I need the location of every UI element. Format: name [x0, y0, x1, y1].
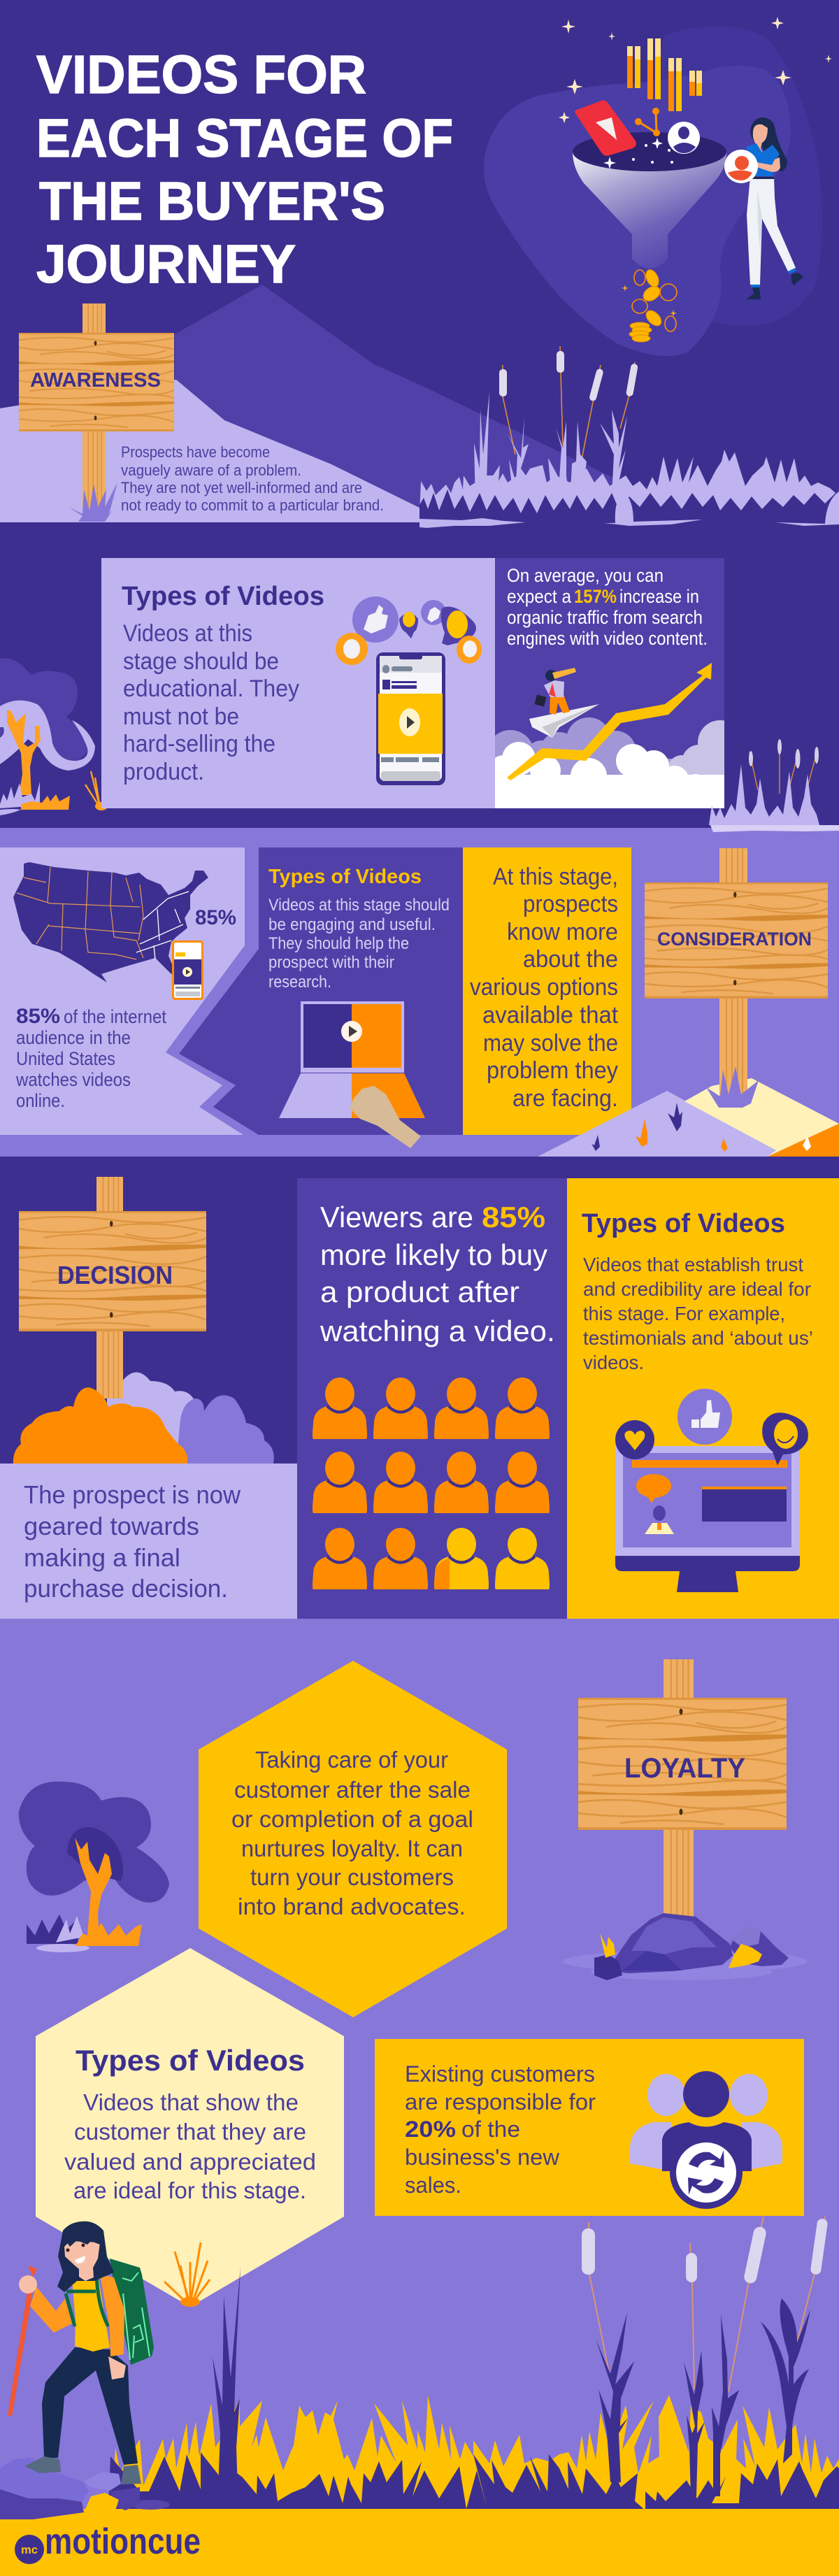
stat text: a product after	[320, 1275, 519, 1308]
statistic text: watches videos	[15, 1069, 131, 1090]
backpack	[110, 2259, 154, 2365]
sign: consideration: CONSIDERATION	[657, 929, 812, 950]
icon: phone on map	[172, 940, 203, 1000]
body text	[64, 2089, 316, 2203]
panel: prospect decision text: making a final	[24, 1543, 180, 1572]
body text right aligned: about the	[523, 946, 618, 973]
face and neck	[753, 124, 768, 154]
body text: They should help the	[268, 934, 409, 953]
logo: motioncue	[15, 2521, 201, 2564]
sign: loyalty: LOYALTY	[624, 1753, 745, 1784]
growth arrow	[507, 663, 712, 780]
body text: testimonials and ‘about us’	[583, 1327, 813, 1349]
woman holding a profile disc	[724, 117, 803, 299]
bottom yellow band	[0, 2509, 839, 2576]
hiker with backpack and pole	[8, 2221, 154, 2484]
orange grass tuft on panel	[164, 2242, 210, 2307]
stat text: engines with video content.	[507, 628, 708, 649]
panel: types of videos (awareness)	[101, 558, 495, 808]
text: awareness description: not ready to commit to a particular brand.	[121, 496, 384, 514]
panel: prospect decision text: geared towards	[24, 1512, 199, 1540]
logo: motioncue: motioncue	[45, 2521, 201, 2562]
heading: Types of Videos	[268, 866, 422, 888]
stat text	[320, 1201, 555, 1347]
section 4 background: loyalty	[0, 1619, 839, 2510]
sign: decision: DECISION	[57, 1261, 173, 1289]
body text right aligned: prospects	[523, 891, 618, 917]
icon: profile	[668, 122, 700, 154]
body text: research.	[268, 973, 331, 992]
panel: hexagon loyalty text: customer after the sale	[234, 1777, 471, 1803]
title	[36, 45, 453, 294]
bushes	[107, 1372, 274, 1464]
statistic text: of the internet	[64, 1006, 166, 1027]
text: awareness description: vaguely aware of a problem.	[121, 461, 301, 479]
body text: videos.	[583, 1352, 644, 1373]
bar chart	[627, 38, 702, 111]
body text: educational. They	[123, 675, 299, 702]
heading: Types of Videos	[582, 1209, 785, 1238]
legs	[42, 2347, 138, 2465]
hills with tufts	[538, 1078, 839, 1157]
icon: monitor with testimonial	[615, 1389, 808, 1592]
icon: returning customers	[630, 2071, 782, 2209]
panel: prospect decision text	[0, 1464, 297, 1619]
body text: stage should be	[123, 648, 279, 675]
body text right aligned: available that	[482, 1002, 619, 1029]
pictogram of people	[313, 1378, 550, 1589]
body text right aligned: At this stage,	[493, 864, 618, 890]
yellow grass	[112, 2395, 839, 2510]
heading: Types of Videos	[76, 2044, 305, 2077]
funnel illustration	[484, 17, 832, 356]
cattail heads	[582, 2218, 828, 2284]
heart bubble	[615, 1420, 654, 1459]
icon: laptop with video	[279, 1001, 425, 1148]
body text: Videos at this stage should	[268, 896, 450, 915]
tree, loyalty	[19, 1782, 169, 1952]
icon: video card	[575, 101, 636, 156]
body text right aligned: are facing.	[512, 1085, 618, 1112]
body text right aligned: may solve the	[483, 1030, 618, 1057]
panel: types of videos (decision)	[567, 1178, 839, 1619]
body text: product.	[123, 759, 204, 785]
sign: awareness: AWARENESS	[30, 369, 161, 392]
title: JOURNEY	[36, 234, 296, 294]
body text: are ideal for this stage.	[73, 2177, 306, 2203]
body text right aligned	[470, 864, 619, 1112]
icon: share network	[635, 108, 660, 136]
body text: Videos that show the	[83, 2089, 299, 2115]
panel: hexagon loyalty text: into brand advocates.	[238, 1894, 466, 1919]
face and neck	[64, 2241, 100, 2281]
stat text: of the	[461, 2117, 520, 2142]
body text	[123, 620, 299, 785]
wink bubble	[762, 1412, 808, 1466]
text: awareness description: Prospects have become	[121, 443, 270, 461]
walking pole	[8, 2289, 33, 2417]
map percent label: 85%	[195, 906, 236, 929]
body text: and credibility are ideal for	[583, 1278, 811, 1300]
panel: prospect decision text: The prospect is now	[24, 1480, 241, 1509]
ground puddles	[420, 492, 839, 528]
grass at consideration sign base	[706, 1066, 759, 1108]
body text	[268, 896, 450, 992]
map of the United States	[13, 862, 208, 982]
heading: Types of Videos	[122, 582, 324, 611]
mountain range	[0, 285, 661, 522]
light swirl	[0, 701, 95, 771]
rock under hiker	[0, 2458, 170, 2519]
funnel	[573, 132, 726, 269]
section 1 background: awareness	[0, 0, 839, 828]
body text right aligned: know more	[507, 919, 618, 945]
body text: Videos at this	[123, 620, 252, 647]
tree left of panel	[0, 658, 114, 815]
light grass blades	[420, 392, 839, 514]
panel: prospect decision text: purchase decision.	[24, 1574, 228, 1603]
statistic text: audience in the	[16, 1027, 131, 1048]
statistic text: online.	[16, 1090, 65, 1111]
logo: motioncue: mc	[21, 2543, 38, 2556]
panel: hexagon loyalty text: nurtures loyalty. It can	[241, 1836, 463, 1861]
grass with reeds, lower right	[709, 739, 819, 825]
sign: decision	[19, 1177, 206, 1398]
body text: prospect with their	[268, 953, 394, 972]
stat text: business's new	[405, 2145, 560, 2170]
body text right aligned: various options	[470, 974, 618, 1001]
panel: hexagon loyalty text: or completion of a goal	[231, 1806, 473, 1832]
text: awareness description: They are not yet well-informed and are	[121, 479, 362, 496]
stat text: increase in	[619, 586, 699, 607]
panel: viewers 85% stat	[297, 1178, 567, 1619]
shoes	[751, 285, 760, 287]
stat text: Viewers are	[320, 1201, 473, 1233]
stat text: watching a video.	[320, 1315, 555, 1347]
pants	[747, 177, 796, 285]
panel: hexagon loyalty text: Taking care of your	[255, 1747, 448, 1773]
stat text	[405, 2061, 596, 2198]
icon: social reactions	[336, 596, 482, 665]
panel: at this stage	[463, 847, 631, 1135]
clouds	[495, 717, 724, 808]
canopy	[0, 658, 89, 766]
icon: smartphone with video	[376, 652, 445, 785]
stat text: sales.	[405, 2173, 461, 2198]
body text: must not be	[123, 703, 239, 730]
reeds and grass, bottom	[108, 2217, 839, 2510]
shirt	[746, 143, 780, 176]
coins and smileys	[622, 268, 677, 342]
stat text	[507, 565, 708, 649]
sign: consideration	[645, 848, 828, 1105]
panel: hexagon loyalty text: turn your customers	[250, 1864, 454, 1890]
dark grass foreground	[108, 2452, 839, 2510]
thumb up bubble	[677, 1389, 732, 1445]
body text	[583, 1254, 813, 1373]
body text: Videos that establish trust	[583, 1254, 803, 1275]
section 2 background: consideration	[0, 828, 839, 1157]
trunk	[7, 710, 41, 795]
panel: 85% internet audience	[0, 847, 245, 1135]
panel: hexagon loyalty text	[199, 1661, 507, 2017]
arm	[755, 157, 780, 172]
panel: types of videos (consideration)	[179, 847, 463, 1148]
panel: organic traffic stat	[495, 558, 724, 808]
stat text: 85%	[482, 1201, 545, 1233]
panel: types of videos (loyalty)	[36, 1948, 344, 2307]
stat text: 157%	[574, 586, 617, 607]
title: VIDEOS FOR	[36, 45, 366, 105]
stat text: more likely to buy	[320, 1238, 547, 1271]
paper plane with man and telescope	[529, 668, 599, 738]
body text: customer that they are	[74, 2119, 306, 2145]
statistic text	[15, 1005, 166, 1111]
statistic text: United States	[16, 1048, 115, 1069]
orange tuft	[85, 767, 114, 808]
reeds and grass	[420, 346, 839, 528]
orange grass	[21, 794, 70, 810]
stat text: Existing customers	[405, 2061, 595, 2087]
body text: this stage. For example,	[583, 1303, 785, 1324]
sign: loyalty	[578, 1659, 787, 1919]
pale grass	[0, 782, 40, 808]
dark grass foreground	[420, 489, 839, 521]
stat text: expect a	[507, 586, 572, 607]
cattail heads	[499, 351, 638, 401]
ground strip under grass	[710, 825, 839, 832]
statistic text: 85%	[16, 1005, 60, 1028]
body text: hard-selling the	[123, 731, 275, 757]
right sleeve	[100, 2275, 124, 2356]
shoes	[24, 2456, 61, 2473]
left arm	[30, 2287, 72, 2333]
profile disc	[724, 150, 758, 183]
cattail stems	[503, 346, 635, 459]
sign: awareness	[19, 303, 174, 508]
title: EACH STAGE OF	[36, 108, 453, 169]
title: THE BUYER'S	[39, 171, 385, 231]
background blobs	[484, 27, 822, 356]
hands	[19, 2275, 37, 2294]
body text: valued and appreciated	[64, 2149, 316, 2175]
dark reed stems	[213, 2267, 810, 2496]
body text: be engaging and useful.	[268, 915, 436, 934]
cattail stems	[589, 2217, 825, 2407]
grass tuft under awareness sign	[69, 482, 117, 522]
stat text: 20%	[405, 2117, 456, 2142]
stat text: organic traffic from search	[507, 607, 703, 628]
rocks	[563, 1913, 808, 1980]
stat text: On average, you can	[507, 565, 664, 586]
section 3 background: decision	[0, 1157, 839, 1619]
stat text: are responsible for	[405, 2089, 596, 2115]
hair	[57, 2221, 114, 2292]
text: awareness description	[121, 443, 384, 514]
orange bush	[13, 1387, 187, 1464]
hair	[750, 117, 787, 171]
panel: existing customers stat	[375, 2039, 804, 2216]
body text right aligned: problem they	[487, 1057, 618, 1084]
stars	[559, 17, 832, 123]
torso	[72, 2275, 110, 2352]
